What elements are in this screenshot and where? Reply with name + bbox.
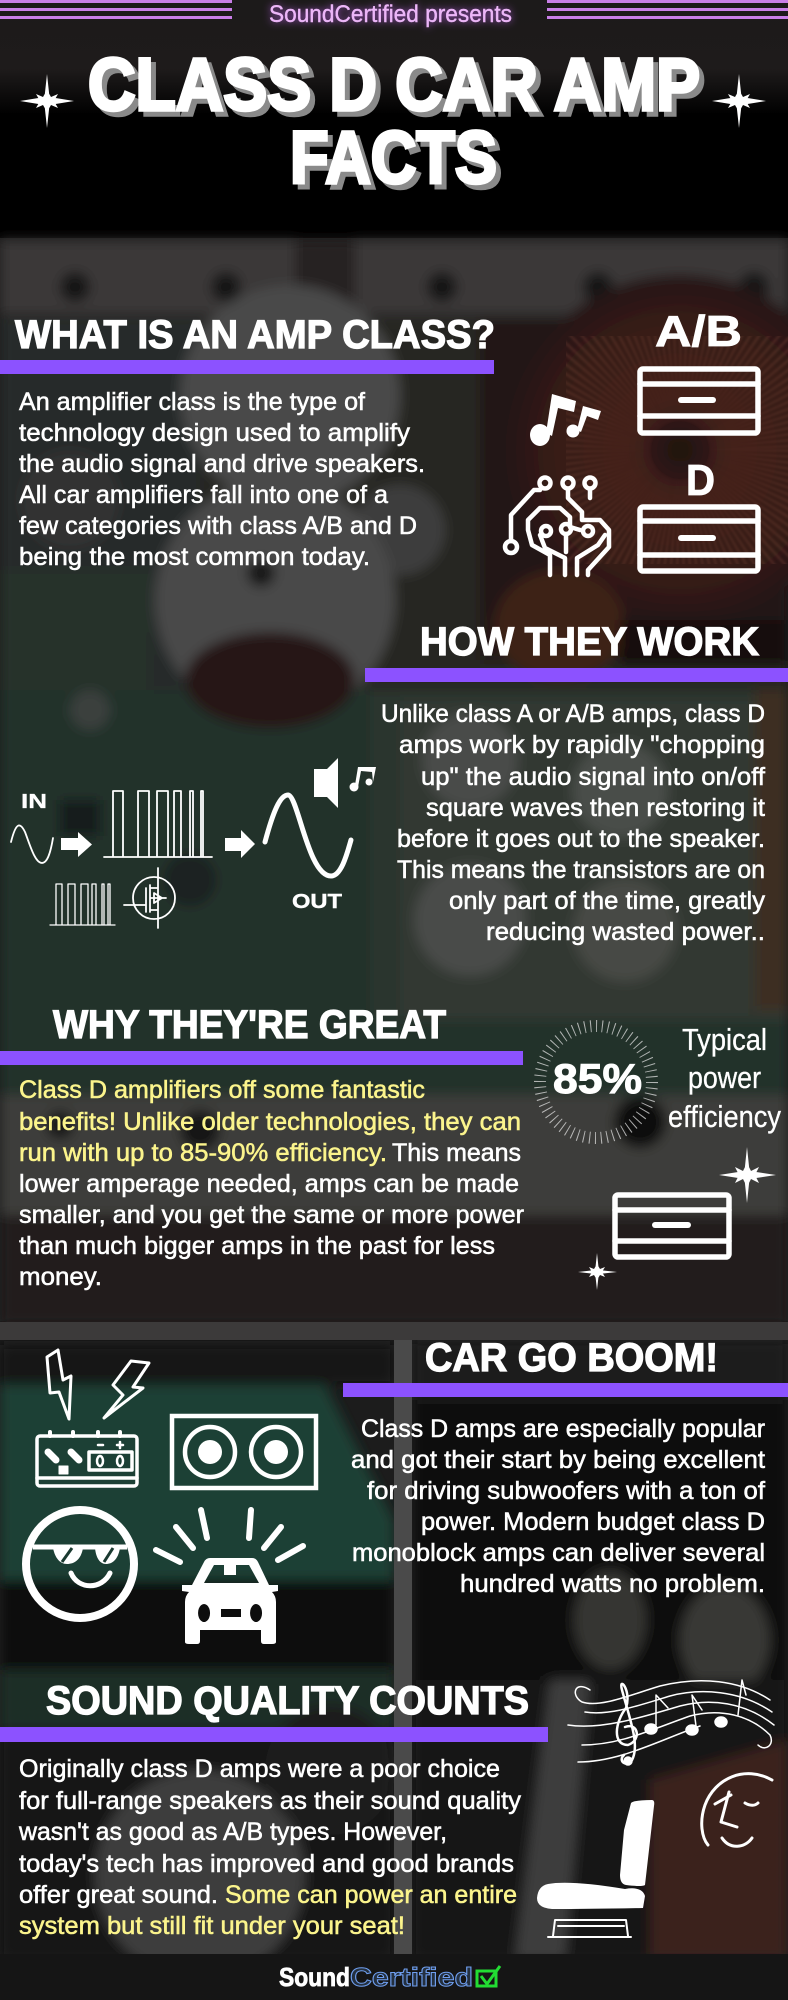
header rule lines [0,0,788,19]
body text: All car amplifiers fall into one of a [19,481,388,509]
label: typical power efficiency: Typical [682,1022,767,1057]
heading: HOW THEY WORK [420,620,759,664]
body text: This means the transistors are on [397,856,765,884]
label: OUT: OUT [292,891,342,913]
diagram: class D signal chain [11,758,376,928]
body text: up" the audio signal into on/off [421,763,765,791]
heading: WHAT IS AN AMP CLASS? [15,313,495,357]
icon: seat rail [548,1920,631,1937]
body text: Originally class D amps were a poor choice [19,1755,500,1783]
icon: green check box [477,1966,500,1986]
heading bar [0,1051,523,1065]
body text [381,700,766,946]
icon: circuit head [505,478,609,575]
presenter tagline: SoundCertified presents [269,1,512,28]
panel: how they work [11,620,788,946]
body text: hundred watts no problem. [460,1570,765,1598]
body text: system but still fit under your seat! [19,1912,405,1940]
body text: lower amperage needed, amps can be made [19,1170,519,1198]
icon: D amplifier [640,507,758,571]
heading bar [343,1383,788,1397]
icon: car seat [537,1800,654,1909]
body text: smaller, and you get the same or more power [19,1201,524,1229]
icon: right sparkle [712,74,766,128]
title [88,43,705,204]
icon: transistor symbol [124,868,175,928]
label: typical power efficiency: power [688,1060,761,1095]
panel: sound quality counts [0,1679,774,1940]
icon: music staff [568,1680,774,1765]
body text: An amplifier class is the type of [19,388,365,416]
label: IN: IN [21,791,47,813]
icon: car [182,1558,278,1644]
icon: sunglasses smiley [26,1510,134,1618]
arrow: in to pulses [61,832,92,857]
body text [19,1076,524,1291]
title: CLASS D CAR AMP [88,43,700,126]
body text: square waves then restoring it [426,794,765,822]
body text: reducing wasted power.. [486,918,765,946]
body text: Class D amplifiers off some fantastic [19,1076,425,1104]
body text: power. Modern budget class D [421,1508,765,1536]
label: D: D [686,456,715,505]
body text: benefits! Unlike older technologies, they can [19,1108,521,1136]
body text: amps work by rapidly "chopping [399,731,765,759]
body text: monoblock amps can deliver several [352,1539,765,1567]
icon: output sine [265,795,351,876]
body text: offer great sound. [19,1881,218,1909]
gauge: 85 percent: 85% [553,1055,642,1102]
body text: being the most common today. [19,543,370,571]
icon: large sparkle [719,1147,776,1203]
body text: This means [392,1139,521,1167]
presenter tagline: SoundCertified presents [269,1,512,28]
heading: CAR GO BOOM! [425,1336,718,1380]
icon: speaker [314,758,338,808]
body text [19,388,425,571]
title: CLASS D CAR AMP [93,48,705,131]
body text: and got their start by being excellent [351,1446,765,1474]
label: typical power efficiency [668,1022,781,1134]
icon: small sparkle [578,1253,617,1290]
body text: for driving subwoofers with a ton of [367,1477,765,1505]
heading: SOUND QUALITY COUNTS [46,1679,529,1723]
body text: Unlike class A or A/B amps, class D [381,700,765,728]
body text: only part of the time, greatly [449,887,766,915]
gauge: 85 percent [540,1026,652,1138]
icon: A/B amplifier [640,369,758,433]
footer logo [279,1962,500,1992]
body text [18,1755,522,1940]
body text: Some can power an entire [225,1881,517,1909]
body text: the audio signal and drive speakers. [19,450,425,478]
icon: subwoofer box [172,1416,316,1488]
panel: what is an amp class [0,307,758,575]
icon: music notes [530,394,601,446]
body text: today's tech has improved and good brands [19,1850,514,1878]
body text: technology design used to amplify [19,419,411,447]
title: FACTS [290,116,497,199]
label: A/B: A/B [655,307,742,356]
body text: than much bigger amps in the past for less [19,1232,495,1260]
title: FACTS [295,121,502,204]
icon: battery [37,1432,137,1486]
icon: smiling face [702,1774,772,1846]
body text: run with up to 85-90% efficiency. [19,1139,387,1167]
icon: small notes [350,767,376,792]
icon: left sparkle [20,74,74,128]
body text: Class D amps are especially popular [361,1415,765,1443]
body text: money. [19,1263,102,1291]
decorative toroid fibres [585,355,775,545]
heading bar [0,360,494,374]
body text: few categories with class A/B and D [19,512,417,540]
body text: for full-range speakers as their sound quality [19,1787,522,1815]
icon: lightning bolts [47,1350,149,1419]
body text [351,1415,765,1598]
body text: wasn't as good as A/B types. However, [18,1818,447,1846]
panel: why they're great [0,1003,781,1291]
heading bar [365,668,788,682]
heading: WHY THEY'RE GREAT [53,1003,446,1047]
footer logo: Certified [350,1962,473,1992]
chart: small pulse train [50,884,115,925]
heading bar [0,1727,548,1742]
body text: before it goes out to the speaker. [397,825,765,853]
icon: class D amplifier [615,1195,729,1257]
footer logo: Sound [279,1962,350,1992]
icon: input sine [11,825,53,863]
arrow: pulses to output [225,830,255,858]
icon: rays [156,1510,303,1562]
panel: car go boom [26,1336,788,1644]
chart: pulse train [104,791,212,857]
